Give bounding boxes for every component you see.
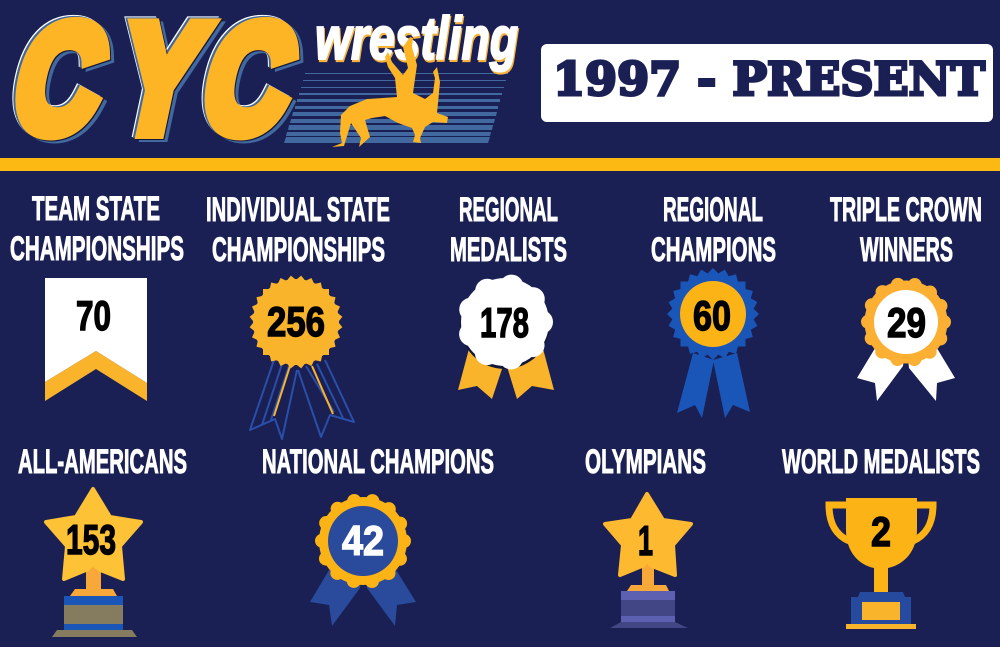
number 70: 70 <box>76 292 111 339</box>
wrestling wordmark: wrestling <box>315 5 518 72</box>
heading <box>10 190 184 268</box>
icon: gold rosette with white ribbons <box>857 280 955 401</box>
heading: CHAMPIONSHIPS <box>10 230 184 268</box>
gold divider bar <box>0 158 1000 171</box>
icon: outlined ribbon rosette <box>250 276 354 439</box>
number 42: 42 <box>342 517 384 564</box>
title box: 1997 - PRESENT <box>541 44 993 122</box>
heading: NATIONAL CHAMPIONS <box>262 443 494 481</box>
heading: INDIVIDUAL STATE <box>206 191 390 229</box>
number 153: 153 <box>66 516 116 563</box>
number 178: 178 <box>480 299 529 346</box>
panel: national champions <box>262 443 494 626</box>
heading <box>450 191 567 269</box>
icon: gold and blue rosette <box>310 497 416 626</box>
heading <box>830 191 982 269</box>
number 1: 1 <box>638 517 653 564</box>
panel: team state championships <box>10 190 184 401</box>
number 2: 2 <box>871 508 891 555</box>
heading <box>651 191 776 269</box>
panel: regional medalists <box>450 191 567 399</box>
icon: blue rosette <box>667 268 759 418</box>
panel: all-americans <box>18 443 187 637</box>
heading: MEDALISTS <box>450 231 567 269</box>
wrestling wordmark: wrestling <box>316 7 519 74</box>
heading: REGIONAL <box>459 191 558 229</box>
stripes behind wrestlers <box>284 73 508 143</box>
heading: REGIONAL <box>663 191 763 229</box>
wrestler silhouette <box>332 37 448 147</box>
number 60: 60 <box>693 292 731 339</box>
panel: individual state championships <box>206 191 390 439</box>
heading: CHAMPIONS <box>651 231 776 269</box>
CYC lettering: CYC <box>5 0 314 167</box>
logo: CYC wrestling <box>0 0 519 167</box>
heading: TEAM STATE <box>32 190 160 228</box>
icon: star trophy <box>605 494 691 628</box>
number 29: 29 <box>887 299 926 346</box>
icon: banner <box>45 278 147 401</box>
icon: trophy cup <box>829 498 933 629</box>
icon: white rosette with gold ribbons <box>458 278 554 399</box>
panel: olympians <box>585 443 706 628</box>
title box: 1997 - PRESENT: 1997 - PRESENT <box>553 52 985 106</box>
heading <box>206 191 390 269</box>
heading: OLYMPIANS <box>585 443 706 481</box>
icon: star trophy <box>46 489 141 637</box>
heading: ALL-AMERICANS <box>18 443 187 481</box>
number 256: 256 <box>267 298 325 345</box>
panel: triple crown winners <box>830 191 982 401</box>
CYC lettering: CYC <box>2 0 311 165</box>
panel: regional champions <box>651 191 776 418</box>
panel: world medalists <box>782 443 980 629</box>
heading: CHAMPIONSHIPS <box>212 231 385 269</box>
